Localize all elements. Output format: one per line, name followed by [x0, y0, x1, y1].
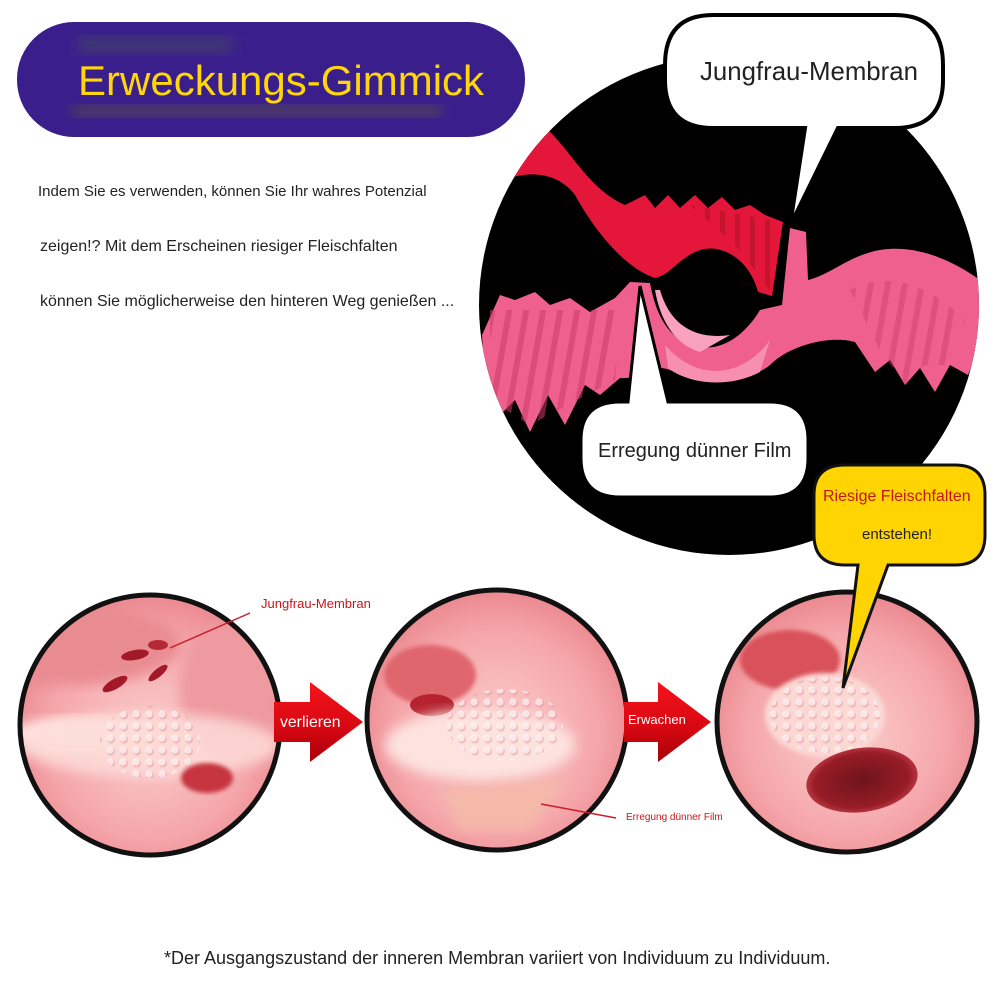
callout: Erregung dünner Film [581, 286, 808, 497]
callout: Riesige Fleischfalten: entstehen! [862, 526, 932, 543]
upper red membrane [510, 130, 783, 296]
intro text block: zeigen!? Mit dem Erscheinen riesiger Fleischfalten [40, 238, 398, 255]
cross-section illustration [479, 55, 980, 555]
intro text block [38, 183, 454, 310]
intro text block: können Sie möglicherweise den hinteren Weg genießen ... [40, 293, 454, 310]
label: Jungfrau-Membran: Jungfrau-Membran [261, 596, 371, 611]
label: Jungfrau-Membran [170, 596, 371, 648]
arrow: Erwachen: Erwachen [628, 712, 686, 727]
arrow: verlieren [274, 682, 363, 762]
title text: Erweckungs-Gimmick [78, 57, 485, 104]
callout: Riesige Fleischfalten [814, 465, 985, 688]
title banner [17, 22, 525, 137]
callout: Jungfrau-Membran: Jungfrau-Membran [700, 58, 918, 86]
callout: Jungfrau-Membran [665, 15, 943, 226]
intro text block: Indem Sie es verwenden, können Sie Ihr wahres Potenzial [38, 183, 427, 200]
step 3: giant folds [717, 592, 977, 852]
step 2: opened membrane [367, 590, 627, 850]
callout: Erregung dünner Film: Erregung dünner Film [598, 440, 791, 462]
footnote: *Der Ausgangszustand der inneren Membran variiert von Individuum zu Individuum. [164, 948, 830, 968]
lower pink membrane [482, 228, 980, 432]
label: Erregung dünner Film [541, 804, 723, 823]
label: Erregung dünner Film: Erregung dünner Film [626, 812, 723, 823]
callout: Riesige Fleischfalten: Riesige Fleischfalten [823, 488, 971, 505]
arrow: Erwachen [624, 682, 711, 762]
step 1: intact membrane [0, 595, 280, 855]
arrow: verlieren: verlieren [280, 714, 341, 731]
